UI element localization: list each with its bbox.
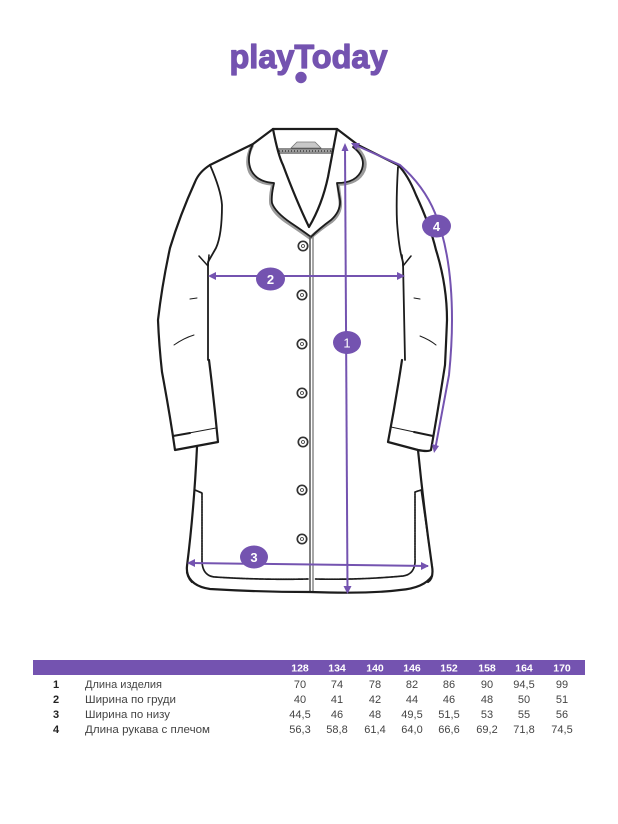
center placket [309, 237, 311, 592]
row 1: 82 [406, 679, 418, 691]
sleeve creases [174, 298, 436, 345]
left side slit stitching [195, 490, 308, 579]
row 3: 46 [331, 709, 343, 721]
row 2: 48 [481, 694, 493, 706]
row 4 [53, 724, 573, 736]
measure 4: sleeve length [351, 143, 452, 453]
row 3: 55 [518, 709, 530, 721]
row 3: Ширина по низу [85, 709, 171, 721]
row 3: 3 [53, 709, 59, 721]
badge 3 [240, 546, 268, 568]
right side seam [418, 450, 432, 582]
row 1: 94,5 [513, 679, 535, 691]
measure 3: hem width [187, 546, 429, 570]
row 3: 53 [481, 709, 493, 721]
row 2: 2 [53, 694, 59, 706]
row 2: Ширина по груди [85, 694, 176, 706]
inner neck V [273, 129, 337, 227]
row 1: 86 [443, 679, 455, 691]
row 4: 71,8 [513, 724, 535, 736]
row 2: 50 [518, 694, 530, 706]
right sleeve outer [388, 165, 447, 451]
neckline and shoulders [210, 129, 398, 165]
table header: 146 [403, 662, 421, 674]
neck stitching [279, 149, 333, 153]
left cuff stitch [173, 428, 216, 436]
table header: 164 [515, 662, 533, 674]
row 3: 56 [556, 709, 568, 721]
row 1: 78 [369, 679, 381, 691]
row 1: 90 [481, 679, 493, 691]
right cuff stitch [391, 427, 433, 436]
logo dot [295, 72, 307, 83]
row 2: 46 [443, 694, 455, 706]
badge 1 [333, 331, 361, 354]
row 4: Длина рукава с плечом [85, 724, 210, 736]
size table [33, 660, 585, 736]
row 2: 51 [556, 694, 568, 706]
table header: 170 [553, 662, 571, 674]
left armhole [208, 165, 222, 360]
row 1 [53, 679, 568, 691]
table header: 134 [328, 662, 346, 674]
table header: 140 [366, 662, 384, 674]
row 4: 69,2 [476, 724, 498, 736]
neck label [291, 142, 321, 148]
row 3: 49,5 [401, 709, 423, 721]
right side slit stitching [315, 490, 421, 579]
measure 4: sleeve length: 4 [433, 219, 441, 234]
row 4: 61,4 [364, 724, 386, 736]
buttons [297, 241, 308, 544]
row 3: 44,5 [289, 709, 311, 721]
measure 2: chest width [208, 268, 405, 290]
outer right seam [421, 490, 431, 560]
left sleeve outer [158, 165, 218, 450]
row 1: Длина изделия [85, 679, 162, 691]
row 4: 74,5 [551, 724, 573, 736]
row 4: 56,3 [289, 724, 311, 736]
row 2 [53, 694, 568, 706]
measure 3: hem width: 3 [250, 550, 258, 565]
measure 1: garment length: 1 [343, 336, 351, 350]
badge 4 [422, 214, 451, 238]
row 2: 41 [331, 694, 343, 706]
logo: playToday [230, 38, 388, 75]
row 2: 40 [294, 694, 306, 706]
row 4: 64,0 [401, 724, 423, 736]
badge 2 [256, 268, 285, 290]
row 4: 58,8 [326, 724, 348, 736]
measure 2: chest width: 2 [267, 272, 274, 287]
row 3: 48 [369, 709, 381, 721]
row 1: 70 [294, 679, 306, 691]
underarm notches [199, 255, 411, 266]
row 1: 1 [53, 679, 59, 691]
collar [249, 144, 363, 237]
row 2: 42 [369, 694, 381, 706]
row 3: 51,5 [438, 709, 460, 721]
table header: 158 [478, 662, 496, 674]
measure 1: garment length [333, 143, 361, 594]
right armhole [397, 167, 405, 360]
table header: 128 [291, 662, 309, 674]
row 1: 74 [331, 679, 343, 691]
left side seam [187, 447, 197, 582]
row 2: 44 [406, 694, 418, 706]
table header [33, 660, 585, 675]
hem [187, 572, 432, 593]
table header: 152 [440, 662, 458, 674]
garment drawing: shirt dress [158, 129, 447, 593]
row 1: 99 [556, 679, 568, 691]
row 4: 66,6 [438, 724, 460, 736]
row 4: 4 [53, 724, 60, 736]
collar shadow [248, 146, 365, 238]
row 3 [53, 709, 568, 721]
